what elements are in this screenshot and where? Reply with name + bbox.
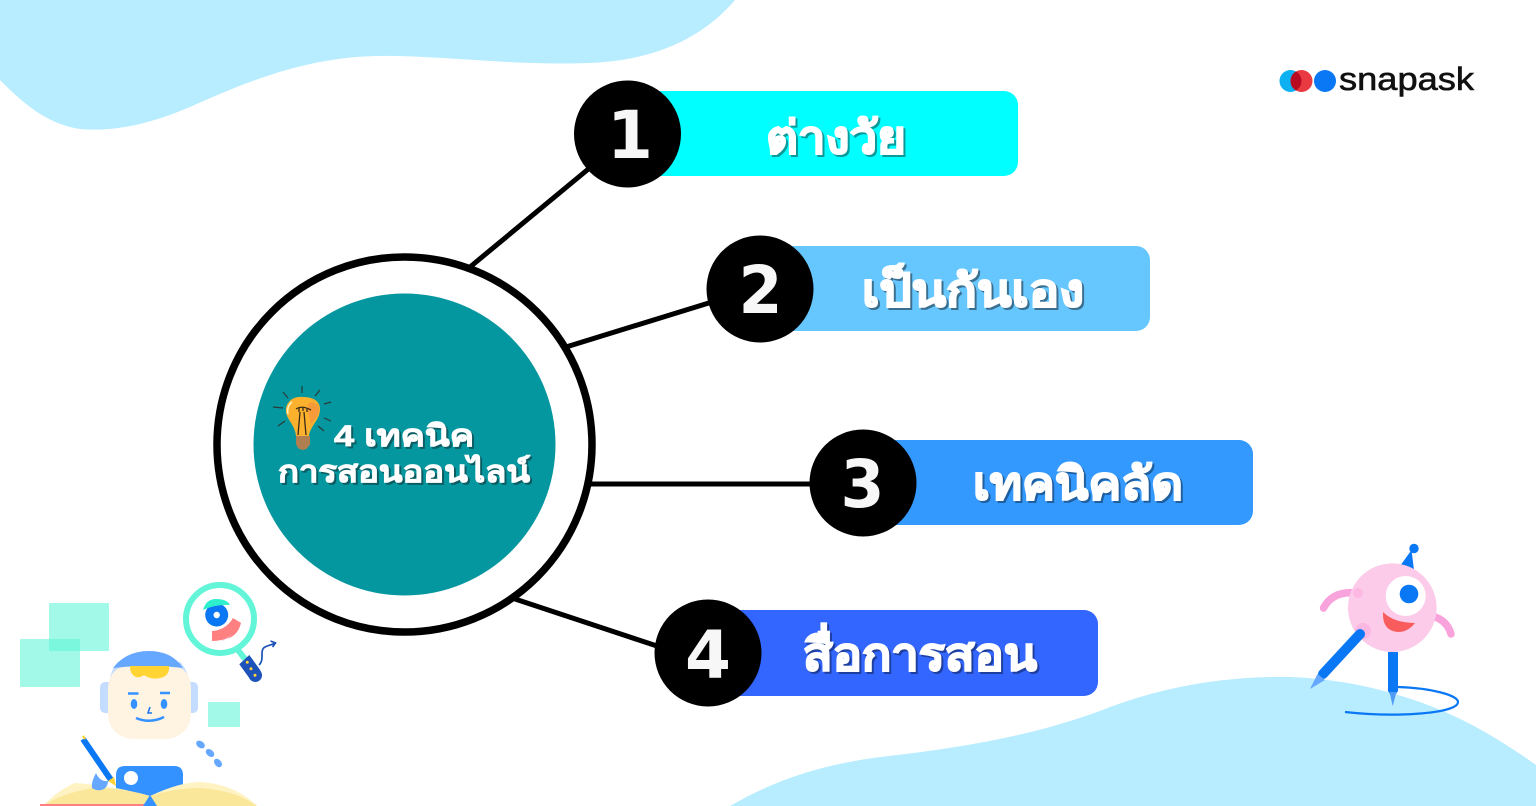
mascot mouth: [1383, 612, 1415, 632]
hub title shadow: [280, 422, 533, 491]
item 2 label: เป็นกันเอง: [862, 263, 1084, 316]
item 1 label: ต่างวัย: [766, 112, 906, 163]
item 4 badge: [654, 600, 762, 706]
item 4 bar: [710, 610, 1098, 696]
helmet dome: [113, 651, 183, 668]
magnifying glass: [186, 585, 276, 682]
hub title shadow: 4 เทคนิค: [336, 422, 476, 455]
student head: [100, 651, 198, 739]
mascot arms: [1324, 593, 1358, 608]
item 4 number: 4: [685, 617, 731, 694]
mascot joints: [1355, 623, 1371, 639]
item 3: [810, 430, 1253, 536]
item 1: [574, 80, 1018, 188]
logo wordmark: snapask: [1339, 61, 1475, 97]
item 2: [706, 236, 1150, 342]
snapask logo: [1280, 61, 1475, 97]
item 2 badge: [706, 236, 814, 342]
illustration: pink skater mascot: [1310, 544, 1458, 715]
item 2 bar: [762, 246, 1150, 331]
hub title text: 4 เทคนิค: [334, 420, 474, 453]
item 2 label shadow: เป็นกันเอง: [864, 265, 1086, 318]
item 3 label: เทคนิคลัด: [973, 458, 1183, 509]
item 3 label shadow: เทคนิคลัด: [975, 460, 1185, 511]
item 1 number: 1: [607, 97, 653, 174]
mascot legs: [1310, 634, 1398, 706]
hair: [130, 666, 169, 679]
hub title text: [278, 420, 533, 491]
mascot eye: [1386, 576, 1426, 616]
central hub: [217, 257, 592, 632]
item 2 number: 2: [738, 252, 782, 329]
illustration: student with book: [20, 585, 276, 806]
item 3 number: 3: [840, 446, 884, 523]
student body: [116, 766, 183, 800]
item 1 label shadow: ต่างวัย: [768, 114, 908, 165]
item 4 label: สื่อการสอน: [803, 623, 1037, 680]
connector lines: [470, 166, 815, 647]
hub teal disc: [254, 294, 556, 596]
decorative mint squares: [20, 603, 240, 727]
icon: light bulb: [273, 386, 331, 450]
bottom-right background blob: [730, 677, 1536, 806]
item 3 badge: [810, 430, 916, 536]
skate trail: [1345, 687, 1458, 715]
hub title shadow: การสอนออนไลน์: [280, 456, 533, 491]
item 1 badge: [574, 80, 681, 188]
hub outer ring: [217, 257, 592, 632]
item 4: [654, 600, 1098, 706]
mascot body: [1348, 563, 1437, 652]
pencil: [83, 737, 116, 790]
item 1 bar: [630, 91, 1018, 176]
face: [108, 665, 191, 739]
hub title text: การสอนออนไลน์: [278, 454, 531, 489]
item 3 bar: [865, 440, 1253, 525]
water drops: [195, 739, 224, 769]
headphones: [100, 682, 198, 713]
helmet side band: [108, 662, 191, 700]
logo dots: [1280, 70, 1336, 92]
open book: [40, 782, 257, 806]
item 4 label shadow: สื่อการสอน: [805, 625, 1039, 682]
top-left background blob: [0, 0, 735, 130]
mascot hat: [1400, 550, 1414, 570]
